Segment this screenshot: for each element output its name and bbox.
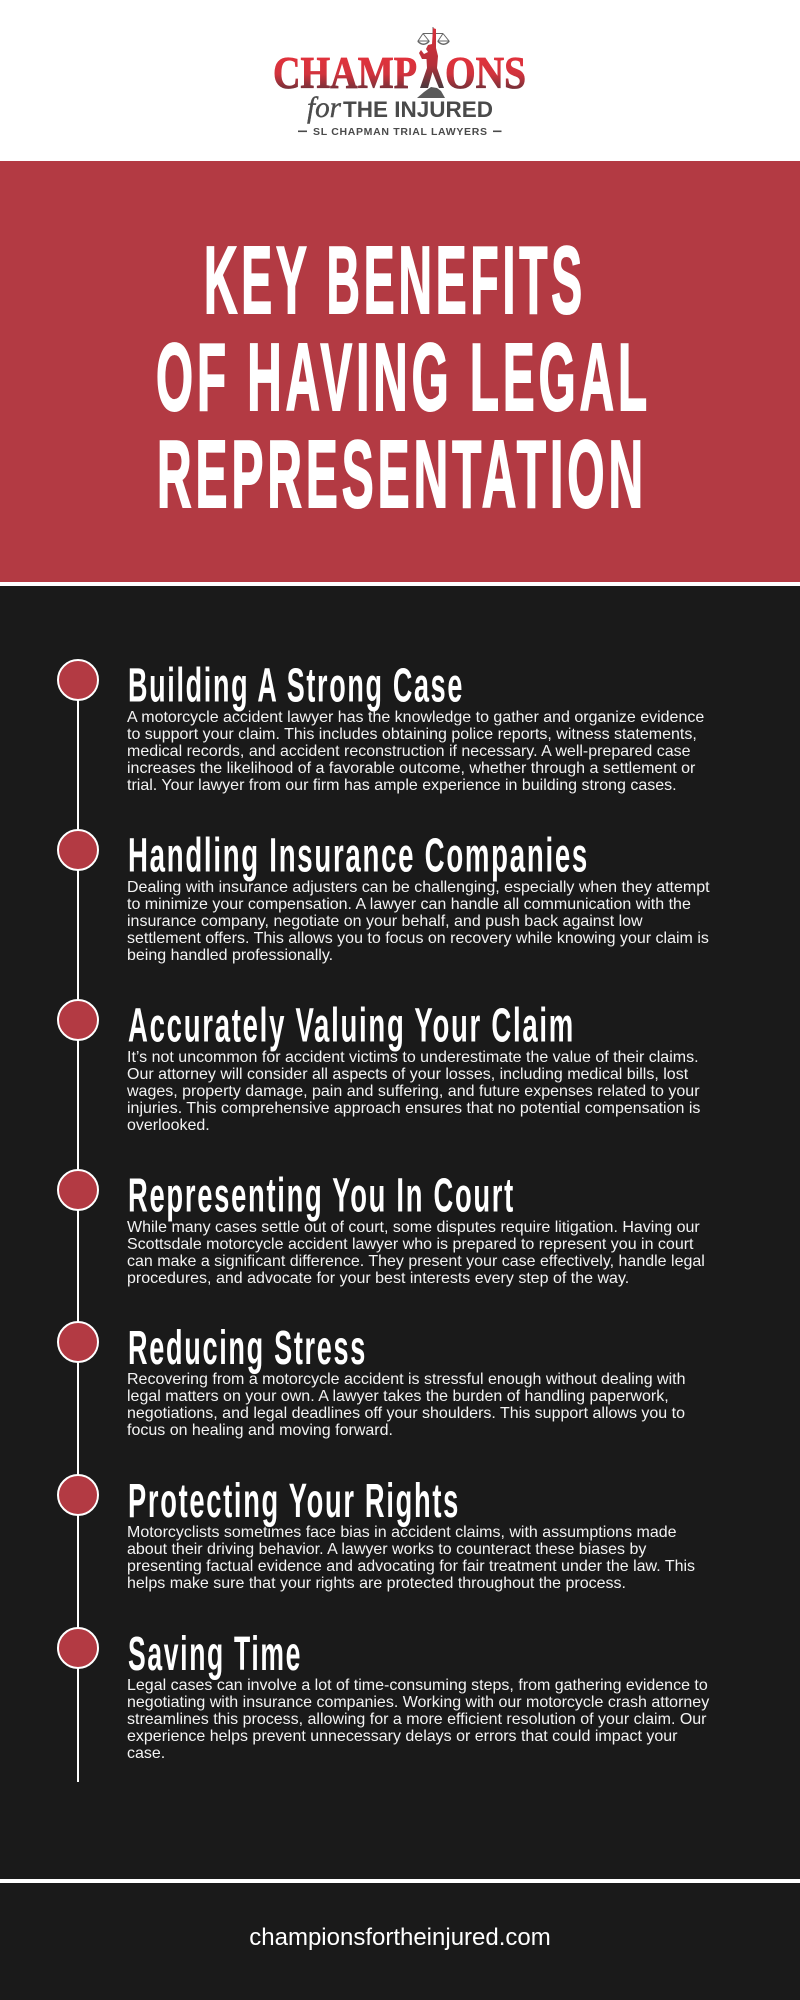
item 2: handling insurance companies (58, 830, 710, 964)
marker 4 (58, 1170, 98, 1210)
body 7: Legal cases can involve a lot of time-consuming steps, from gathering evidence to (127, 1677, 708, 1694)
logo tagline: SL CHAPMAN TRIAL LAWYERS (313, 126, 487, 138)
body 2: to minimize your compensation. A lawyer can handle all communication with the (127, 896, 691, 913)
body 2: being handled professionally. (127, 947, 333, 964)
body 1: increases the likelihood of a favorable outcome, whether through a settlement or (127, 760, 696, 777)
body 1 (127, 709, 704, 794)
marker 2 (58, 830, 98, 870)
title (156, 227, 651, 528)
body 7: experience helps prevent unnecessary delays or errors that could impact your (127, 1728, 678, 1745)
body 3: wages, property damage, pain and suffering, and future expenses related to your (126, 1083, 700, 1100)
body 5: legal matters on your own. A lawyer takes the burden of handling paperwork, (127, 1388, 669, 1405)
body 4: can make a significant difference. They present your case effectively, handle legal (127, 1253, 705, 1270)
body 4 (127, 1219, 705, 1287)
body 2: Dealing with insurance adjusters can be challenging, especially when they attempt (127, 879, 710, 896)
body 5: negotiations, and legal deadlines off your shoulders. This support allows you to (127, 1405, 685, 1422)
body 5: Recovering from a motorcycle accident is stressful enough without dealing with (127, 1371, 686, 1388)
body 5: focus on healing and moving forward. (127, 1422, 393, 1439)
body 3: overlooked. (127, 1117, 210, 1134)
body 3 (126, 1049, 700, 1134)
marker 1 (58, 660, 98, 700)
heading 1: Building A Strong Case (128, 660, 464, 712)
item 7: saving time (58, 1628, 709, 1762)
body 7 (127, 1677, 709, 1762)
body 4: While many cases settle out of court, some disputes require litigation. Having our (127, 1219, 700, 1236)
body 2 (127, 879, 710, 964)
body 3: Our attorney will consider all aspects of your losses, including medical bills, lost (127, 1066, 689, 1083)
footer divider (0, 1879, 800, 1883)
header: white logo band (0, 0, 800, 161)
body 1: medical records, and accident reconstruction if necessary. A well-prepared case (127, 743, 691, 760)
marker 5 (58, 1322, 98, 1362)
body 1: to support your claim. This includes obtaining police reports, witness statements, (127, 726, 697, 743)
body 6: Motorcyclists sometimes face bias in accident claims, with assumptions made (127, 1524, 677, 1541)
marker 7 (58, 1628, 98, 1668)
body 3: injuries. This comprehensive approach ensures that no potential compensation is (127, 1100, 700, 1117)
body 4: procedures, and advocate for your best interests every step of the way. (127, 1270, 629, 1287)
body 7: negotiating with insurance companies. Working with our motorcycle crash attorney (127, 1694, 709, 1711)
body 3: It’s not uncommon for accident victims to underestimate the value of their claims. (127, 1049, 699, 1066)
item 5: reducing stress (58, 1322, 686, 1439)
body 6: about their driving behavior. A lawyer works to counteract these biases by (127, 1541, 646, 1558)
body 2: insurance company, negotiate on your behalf, and push back against low (127, 913, 643, 930)
body 6 (127, 1524, 695, 1592)
logo wordmark: Champions: CHAMP (273, 48, 417, 98)
logo text: the injured: THE INJURED (343, 97, 493, 122)
body 7: case. (127, 1745, 165, 1762)
logo icon: figure holding scales (417, 27, 449, 98)
timeline line (77, 680, 79, 1782)
item 1: building a strong case (58, 660, 704, 794)
body 1: A motorcycle accident lawyer has the knowledge to gather and organize evidence (127, 709, 704, 726)
divider (0, 582, 800, 586)
item 6: protecting your rights (58, 1475, 695, 1592)
body 6: presenting factual evidence and advocating for fair treatment under the law. This (127, 1558, 695, 1575)
body 5 (127, 1371, 686, 1439)
heading 5: Reducing Stress (128, 1322, 367, 1375)
footer url: championsfortheinjured.com (249, 1924, 551, 1951)
logo wordmark: Champions (273, 48, 526, 98)
body 4: Scottsdale motorcycle accident lawyer who is prepared to represent you in court (127, 1236, 694, 1253)
logo (273, 27, 526, 138)
title band (0, 161, 800, 582)
heading 7: Saving Time (128, 1628, 302, 1681)
heading 6: Protecting Your Rights (128, 1475, 460, 1528)
marker 3 (58, 1000, 98, 1040)
marker 6 (58, 1475, 98, 1515)
body 6: helps make sure that your rights are protected throughout the process. (127, 1575, 626, 1592)
body 1: trial. Your lawyer from our firm has ample experience in building strong cases. (127, 777, 677, 794)
body 2: settlement offers. This allows you to focus on recovery while knowing your claim is (127, 930, 709, 947)
logo script: for: for (307, 91, 341, 124)
logo wordmark: Champions: ONS (445, 48, 526, 98)
item 3: accurately valuing your claim (58, 1000, 700, 1134)
heading 4: Representing You In Court (128, 1170, 515, 1222)
item 4: representing you in court (58, 1170, 705, 1287)
body 7: streamlines this process, allowing for a more efficient resolution of your claim. Our (127, 1711, 707, 1728)
